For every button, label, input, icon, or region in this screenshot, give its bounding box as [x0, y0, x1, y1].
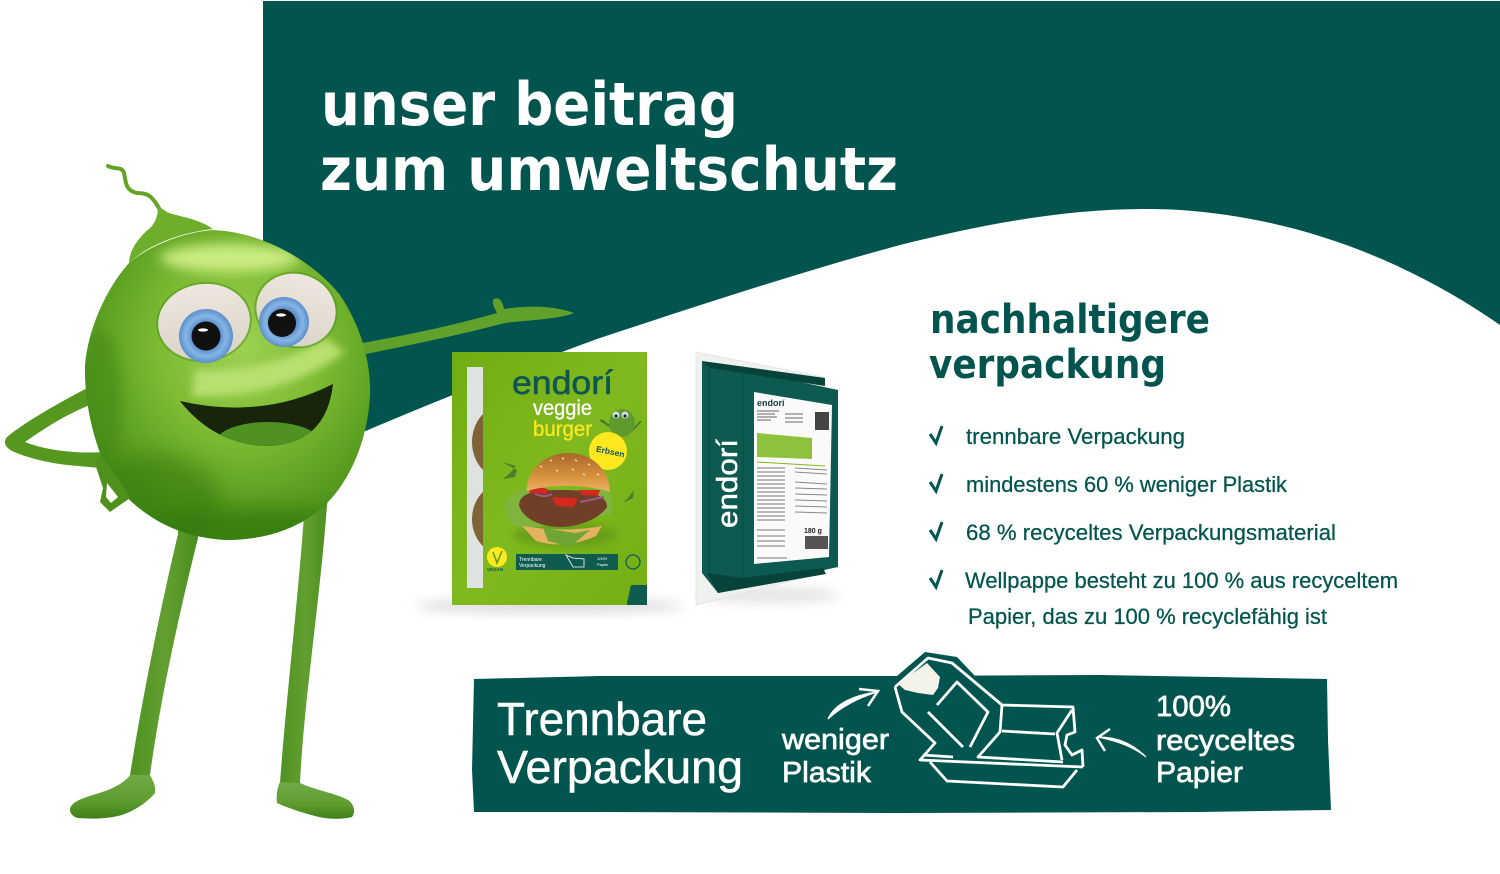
- information label: endorí: [757, 398, 785, 408]
- arrow to plastic window: [828, 689, 878, 719]
- round seal: [626, 555, 640, 569]
- right eye: [244, 261, 348, 359]
- heading: sustainable packaging: verpackung: [929, 342, 1166, 388]
- corner flap: [627, 585, 647, 605]
- stem cap: [129, 206, 213, 263]
- item: recycled material: 68 % recyceltes Verpackungsmaterial: [966, 520, 1336, 545]
- product: back of burger pack: [696, 352, 840, 605]
- label: recycled paper: 100%: [1156, 691, 1231, 723]
- product name: burger: [533, 418, 592, 441]
- window with patties: [467, 367, 483, 588]
- item: corrugated board: Papier, das zu 100 % recyclefähig ist: [968, 604, 1327, 629]
- mouth: [180, 384, 333, 446]
- vegan badge: VEGAN: [487, 567, 503, 572]
- title: zum umweltschutz: [320, 135, 898, 205]
- body shading: [78, 244, 360, 552]
- product name: veggie: [533, 397, 592, 420]
- label: recycled paper: [1156, 691, 1295, 789]
- label: recycled paper: recyceltes: [1156, 725, 1295, 757]
- label: less plastic: [781, 724, 889, 789]
- dark green wave background: [263, 1, 1500, 470]
- mini packaging banner: Trennbare: [519, 557, 542, 563]
- title: unser beitrag: [321, 70, 738, 140]
- right leg and foot: [277, 490, 354, 819]
- product: front of burger pack: [415, 352, 685, 612]
- mini mascot: [600, 409, 641, 447]
- pack shadow: [415, 600, 685, 612]
- mini packaging banner: Papier: [597, 562, 609, 567]
- herb garnish left: [502, 462, 517, 479]
- brand name vertical: endorí: [712, 439, 744, 528]
- vegan badge: [487, 547, 507, 572]
- peas badge: Erbsen: [595, 444, 625, 459]
- banner heading: Verpackung: [497, 741, 743, 793]
- body: [85, 230, 370, 540]
- left eye: [151, 276, 257, 368]
- item: corrugated board: [930, 568, 1398, 629]
- arrow to paper tray: [1097, 729, 1146, 757]
- benefits checklist: [930, 424, 1398, 629]
- information label: [754, 392, 832, 564]
- herb garnish right: [623, 490, 634, 503]
- back pack shadow: [700, 588, 840, 602]
- information label: 180 g: [804, 528, 822, 535]
- label: less plastic: weniger: [781, 724, 889, 756]
- hand on hip: [96, 455, 130, 512]
- left arm upper: [5, 384, 104, 468]
- label: less plastic: Plastik: [782, 757, 872, 789]
- mini packaging banner: [516, 554, 618, 570]
- product name: [533, 397, 592, 441]
- banner heading: Trennbare: [497, 693, 707, 745]
- item: less plastic: mindestens 60 % weniger Plastik: [966, 472, 1288, 497]
- right arm pointing: [362, 298, 574, 354]
- left leg and foot: [70, 510, 200, 819]
- burger photo: [505, 453, 617, 547]
- mini packaging banner: Verpackung: [519, 563, 546, 569]
- brand logo: endorí: [512, 364, 613, 401]
- mascot: pea character: [5, 166, 574, 819]
- heading: sustainable packaging: nachhaltigere: [930, 297, 1210, 343]
- mini packaging banner: 100%: [597, 556, 608, 561]
- item: separable: trennbare Verpackung: [966, 424, 1185, 449]
- tendril: [108, 166, 160, 210]
- banner heading: [497, 693, 743, 793]
- heading: sustainable packaging: [929, 297, 1210, 388]
- item: corrugated board: Wellpappe besteht zu 100 % aus recyceltem: [965, 568, 1398, 593]
- banner: separable packaging: [472, 652, 1331, 813]
- label: recycled paper: Papier: [1156, 757, 1243, 789]
- title: [320, 70, 898, 205]
- icon: opened cardboard tray: [895, 652, 1083, 787]
- peas badge: [589, 432, 627, 470]
